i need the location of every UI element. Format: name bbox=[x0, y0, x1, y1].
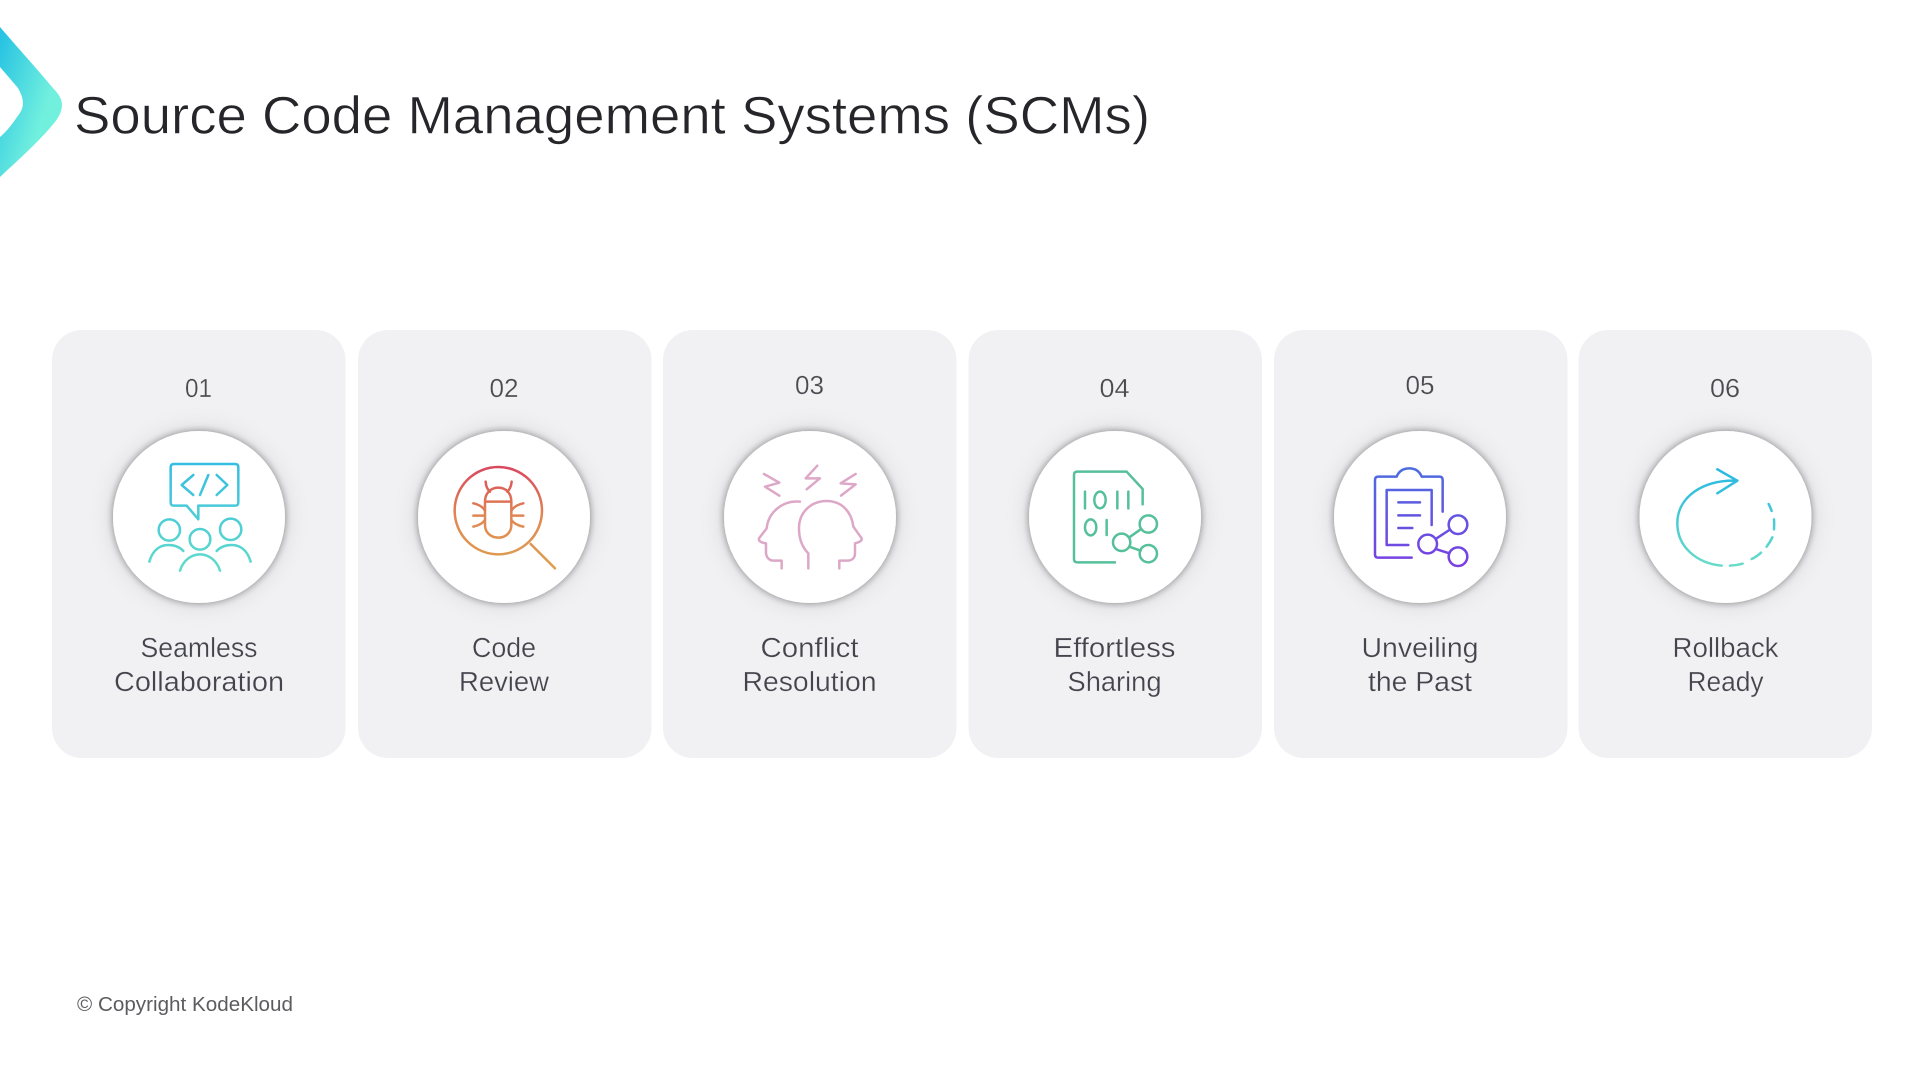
copyright footer: © Copyright KodeKloud bbox=[77, 994, 293, 1016]
icon circle bbox=[113, 431, 285, 603]
icon: header chevron bbox=[0, 27, 62, 177]
number 01: 01 bbox=[185, 373, 212, 403]
label: Review bbox=[459, 666, 550, 697]
number 05: 05 bbox=[1406, 370, 1434, 400]
panel: 05 Unveiling the Past bbox=[1274, 330, 1568, 758]
icon circle bbox=[1029, 431, 1201, 603]
icon: two heads with bolts bbox=[759, 466, 862, 568]
label: Code bbox=[472, 632, 536, 663]
panel: 04 Effortless Sharing bbox=[968, 330, 1262, 758]
panel: 03 Conflict Resolution bbox=[663, 330, 956, 758]
icon circle bbox=[1640, 431, 1812, 603]
title: Source Code Management Systems (SCMs) bbox=[74, 86, 1150, 146]
label: Effortless bbox=[1054, 632, 1176, 663]
label: Ready bbox=[1688, 666, 1764, 697]
icon: rollback arrow bbox=[1677, 469, 1774, 566]
number 02: 02 bbox=[490, 373, 518, 403]
label: Collaboration bbox=[114, 666, 284, 697]
icon: binary file with share nodes bbox=[1074, 472, 1157, 562]
icon circle bbox=[418, 431, 590, 603]
label: Conflict bbox=[760, 632, 859, 663]
label: Resolution bbox=[742, 666, 876, 697]
icon circle bbox=[1334, 431, 1506, 603]
label: the Past bbox=[1368, 666, 1472, 697]
panel: 06 Rollback Ready bbox=[1578, 330, 1872, 758]
icon: code chat and team bbox=[149, 464, 251, 571]
label: Unveiling bbox=[1362, 632, 1478, 663]
number 04: 04 bbox=[1100, 373, 1130, 403]
number 06: 06 bbox=[1710, 373, 1740, 403]
label: Sharing bbox=[1068, 666, 1162, 697]
icon: clipboard with share nodes bbox=[1375, 468, 1467, 566]
panel: 01 Seamless Collaboration bbox=[52, 330, 346, 758]
icon: bug under magnifier bbox=[455, 467, 555, 568]
label: Rollback bbox=[1672, 632, 1779, 663]
panel: 02 Code Review bbox=[358, 330, 652, 758]
label: Seamless bbox=[140, 632, 258, 663]
number 03: 03 bbox=[795, 370, 824, 400]
icon circle bbox=[724, 431, 896, 603]
